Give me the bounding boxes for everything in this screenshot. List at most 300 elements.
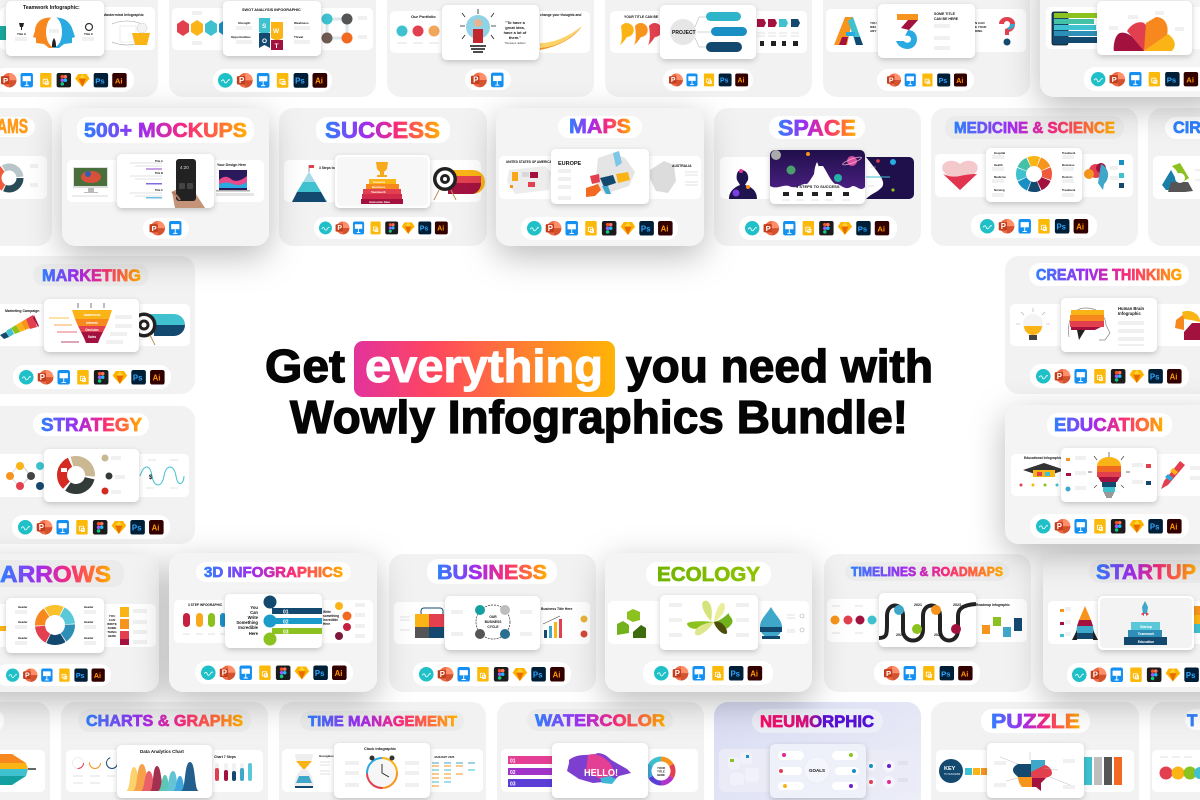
back slide: desktop and laptop mockups (67, 160, 264, 202)
center slide: trophy and steps: Awesome Idea (369, 200, 390, 204)
icon row: Ai (115, 76, 123, 85)
center slide: phone in hand: 4:20 (180, 165, 189, 170)
icon row: Ps (76, 672, 85, 680)
icon row (643, 661, 773, 685)
icon row (971, 214, 1097, 238)
back slide: pins: Incredible (323, 618, 338, 622)
center slide: 3D steps: 03 (283, 630, 289, 636)
back slide: network and wave: $ (149, 475, 153, 481)
card: project (605, 0, 812, 97)
heading: MARKETING: MARKETING (42, 266, 141, 285)
center slide: petal chart (1097, 1, 1192, 55)
icon row (0, 664, 111, 686)
center slide: SWOT analysis infographic: Weakness (294, 21, 309, 25)
center slide: trophy and steps: Teamwork (371, 190, 386, 194)
center slide: 3D steps: Incredible (238, 625, 259, 630)
back slide: tag list: THING (107, 630, 117, 634)
back slide: hourglass and calendar: JANUARY 2025 (434, 755, 455, 759)
icon row: Ai (1170, 522, 1177, 531)
center slide: arrow ring: Header (84, 620, 94, 624)
icon row: P (1093, 670, 1098, 679)
icon row: P (1057, 522, 1062, 531)
back slide: mastermind infographic (0, 7, 155, 50)
back slide: donuts and bars: Chart 7 Steps (214, 755, 236, 759)
center slide: number 3 (878, 4, 975, 58)
center slide: wheel infographic: Doctors (1062, 175, 1073, 179)
card: CHARTS & GRAPHS (61, 702, 268, 800)
icon row: Ai (661, 224, 668, 233)
center slide: 3D steps (225, 594, 322, 648)
back slide: watercolor stripes and ring: TITLE (657, 770, 665, 774)
icon row: P (239, 76, 244, 85)
back slide: key and puzzle columns (936, 750, 1134, 792)
back slide: portfolio (390, 11, 590, 53)
card: MEDICINE & SCIENCE (931, 108, 1138, 246)
center slide: 3D steps: Something (236, 620, 258, 625)
icon row: P (1057, 372, 1062, 381)
icon row (739, 216, 897, 240)
center slide: SWOT analysis infographic: Opportunities (231, 35, 251, 39)
card: PUZZLE (931, 702, 1139, 800)
card: ECOLOGY (shadowed) (605, 553, 812, 692)
center slide: human brain infographic: Infographic (1118, 311, 1141, 316)
icon row: P (152, 224, 157, 233)
center slide: teamwork heads: Title A (17, 32, 27, 36)
icon row: Ai (153, 373, 160, 382)
center slide: marketing funnel (44, 299, 139, 352)
center slide: phone in hand: Title B (155, 171, 163, 175)
icon row: Ai (437, 226, 444, 233)
back slide: portfolio: change your thoughts and (540, 13, 581, 17)
center slide: arrow ring: Header (18, 605, 28, 609)
back slide: key and puzzle columns: TO SUCCESS (944, 773, 961, 776)
icon row: Ai (877, 224, 885, 233)
back slide: USA and Australia maps: AUSTRALIA (672, 164, 692, 168)
center slide: 3D steps: You (250, 605, 258, 610)
back slide: phone bars (1046, 7, 1200, 49)
center slide: 3D steps: 01 (283, 610, 289, 616)
center slide: trophy and steps: Success (373, 180, 386, 184)
center slide: human brain infographic: Human Brain (1118, 306, 1145, 311)
card: STRATEGY (0, 406, 195, 544)
heading: NEUMORPHIC: NEUMORPHIC (760, 712, 874, 731)
headline line one: you need with (626, 340, 933, 392)
icon row (663, 69, 753, 91)
center slide: Europe map: EUROPE (558, 161, 582, 167)
back slide: letter A and question mark: ANY (870, 29, 876, 33)
center slide: brain puzzle (987, 743, 1084, 798)
center slide: Europe map (551, 149, 649, 204)
icon row: Ps (295, 77, 305, 86)
icon row (521, 217, 678, 240)
icon row: P (671, 77, 676, 84)
back slide: letter A and question mark: YOU (870, 21, 877, 25)
center slide: SWOT analysis infographic (223, 1, 321, 56)
center slide: winding road (879, 593, 976, 647)
center slide: wheel infographic: Treatment (1062, 188, 1075, 192)
back slide: pins: Write (323, 610, 331, 614)
back slide: watercolor stripes and ring: YOUR (657, 766, 665, 770)
back slide: key and puzzle columns: KEY (944, 766, 956, 772)
heading: TIMELINES & ROADMAPS: TIMELINES & ROADMAPS (851, 564, 1003, 579)
icon row: P (337, 225, 342, 232)
center slide: SWOT analysis infographic: T (274, 43, 278, 50)
center slide: wheel infographic: Hospital (994, 151, 1005, 155)
icon row: Ps (1150, 372, 1160, 381)
back slide: tag list: YOU (109, 614, 115, 618)
highlight pill: everything: everything (365, 340, 603, 392)
icon row: P (3, 76, 8, 85)
heading: EDUCATION: EDUCATION (1054, 415, 1163, 435)
center slide: wheel infographic: Nursing (994, 188, 1005, 192)
icon row: Ai (553, 670, 560, 679)
center slide: quote and bulb portrait: great idea, (505, 25, 525, 30)
center slide: data analytics chart: Data Analytics Chart (140, 749, 184, 754)
back slide: tag list: CAN (109, 618, 115, 622)
icon row: Ps (315, 669, 325, 678)
back slide: briefcase and bar chart (394, 602, 590, 644)
back slide: recycle and water drop (608, 601, 809, 644)
card: Teamwork and Mastermind (top row) (0, 0, 158, 97)
icon row: Ps (133, 373, 143, 382)
heading: CHARTS & GRAPHS: CHARTS & GRAPHS (86, 713, 243, 730)
back slide: watercolor stripes and ring (501, 749, 698, 792)
back slide: hourglass and calendar: Hourglass (319, 754, 334, 758)
icon row: Ps (941, 669, 951, 678)
card: 3D INFOGRAPHICS (shadowed) (169, 553, 377, 692)
icon row: Ps (1186, 671, 1196, 680)
center slide: marketing funnel: Sales (88, 335, 96, 339)
center slide: teamwork heads: Title C (84, 32, 94, 36)
back slide: pins: 3 STEP INFOGRAPHIC (188, 603, 223, 607)
center slide: SWOT analysis infographic: Threat (294, 35, 303, 39)
heading: SPACE: SPACE (778, 116, 856, 140)
center slide: quote and bulb portrait: them." (509, 35, 521, 40)
card: WATERCOLOR (497, 702, 704, 800)
center slide: bulb steps (1061, 448, 1157, 502)
center slide: human brain infographic (1061, 298, 1157, 352)
center slide: startup steps on map (1098, 596, 1194, 650)
card: 500+ MOCKUPS (shadowed) (62, 108, 269, 246)
center slide: phone in hand: Title A (155, 159, 163, 163)
headline: Get everything you need with Wowly Infographics Bundle! (265, 340, 933, 443)
icon row: Ps (533, 670, 543, 679)
icon row: Ai (961, 669, 968, 678)
card: SPACE (714, 108, 921, 246)
center slide: quote and bulb portrait (442, 5, 539, 60)
card: left edge row five (0, 702, 50, 800)
back slide: letter A and question mark: E YOUR (975, 25, 987, 29)
back slide: portfolio: Our Portfolio (411, 14, 436, 19)
back slide: colored heads (1152, 750, 1200, 792)
icon row: P (1112, 75, 1117, 84)
icon row: Ps (720, 78, 729, 85)
center slide: strategy wheel (44, 449, 139, 502)
center slide: SWOT analysis infographic: Strength (238, 21, 250, 25)
icon row: P (40, 373, 45, 382)
center slide: goals diagram (770, 744, 866, 798)
card: CIRCLE right edge (1148, 108, 1200, 246)
back slide: mastermind infographic: Mastermind Infographic (103, 13, 144, 17)
center slide: trophy and steps (335, 155, 430, 208)
card: MAPS (shadowed) (496, 108, 704, 246)
center slide: SWOT analysis infographic: S (262, 23, 267, 30)
card: NEUMORPHIC (714, 702, 921, 800)
heading: 500+ MOCKUPS: 500+ MOCKUPS (84, 120, 247, 142)
back slide: tag list: WRITE (107, 622, 117, 626)
back slide: USA and Australia maps: UNITED STATES OF AMERICA (506, 160, 553, 164)
center slide: clock infographic: Clock Infographic (364, 747, 396, 751)
icon row: P (473, 76, 478, 85)
card: STARTUP (shadowed) (1043, 554, 1200, 692)
back slide: watercolor stripes and ring: 01 (510, 758, 516, 764)
center slide: quote and bulb portrait: have a lot of (504, 30, 527, 35)
center slide: phone in hand (117, 154, 214, 208)
back slide: heart and brain (935, 154, 1133, 197)
icon row: Ps (420, 226, 428, 233)
heading: ECOLOGY: ECOLOGY (657, 564, 761, 586)
center slide: wheel infographic (986, 148, 1082, 202)
center slide: winding road: 2021 (914, 603, 922, 607)
back slide: graduation cap and pencil (1011, 454, 1200, 496)
back slide: pins: something (323, 614, 339, 618)
center slide: quote and bulb portrait: "To have a (505, 20, 526, 25)
center slide: marketing funnel: Awareness (84, 313, 101, 317)
center slide: wheel infographic: Business (1062, 163, 1075, 167)
center slide: winding road: 2023 (953, 603, 961, 607)
heading: STARTUP: STARTUP (1096, 561, 1196, 584)
back slide: donuts and bars (66, 750, 263, 792)
card: ARROWS (shadowed) (0, 554, 159, 692)
icon row: Ps (1150, 522, 1160, 531)
heading: CREATIVE THINKING (1029, 263, 1189, 286)
icon row (877, 69, 974, 91)
back slide: layered arrow (0, 750, 45, 792)
back slide: ring diagram (0, 156, 47, 199)
heading: STRATEGY: STRATEGY (41, 415, 142, 435)
heading: partial title: T (1187, 711, 1198, 730)
heading: BUSINESS (427, 559, 557, 584)
back slide: rocket stack (1048, 601, 1200, 644)
heading: SUCCESS: SUCCESS (325, 117, 440, 143)
center slide: SWOT analysis infographic: SWOT ANALYSIS INFOGRAPHIC (242, 8, 301, 12)
center slide: startup steps on map: Education (1138, 640, 1154, 644)
icon row (1067, 663, 1200, 687)
back slide: letter A and question mark (826, 9, 1026, 52)
card: CREATIVE THINKING (1005, 256, 1200, 394)
headline line one (265, 340, 933, 397)
back slide: neumorphic tiles (719, 749, 917, 792)
center slide: SWOT analysis infographic: O (262, 38, 267, 45)
center slide: marketing funnel: Decision (85, 328, 99, 332)
icon row (13, 365, 171, 389)
heading: PUZZLE: PUZZLE (991, 711, 1080, 733)
back slide: bulb and head (1010, 304, 1200, 346)
center slide: project diagram: PROJECT (672, 30, 696, 36)
heading: BUSINESS: BUSINESS (437, 562, 547, 584)
back slide: watercolor stripes and ring: HERE (657, 773, 665, 777)
card: petals top right (shadowed) (1040, 0, 1200, 97)
icon row (143, 218, 189, 239)
icon row: P (766, 224, 771, 233)
center slide: goals diagram: GOALS (809, 768, 825, 773)
heading: MEDICINE & SCIENCE (945, 116, 1124, 139)
back slide: astronaut silhouette and galaxy (720, 157, 914, 199)
icon row: Ai (94, 672, 101, 680)
card: circular economy left edge (0, 108, 52, 246)
icon row (465, 69, 511, 90)
card: alphabet and numbers (823, 0, 1030, 97)
center slide: data analytics chart (117, 745, 212, 798)
back slide: pins: Here (323, 622, 330, 626)
icon row (195, 661, 353, 684)
icon row: P (675, 669, 680, 678)
icon row: Ps (132, 523, 142, 532)
center slide: hello splash (552, 743, 648, 798)
back slide: letter A and question mark: DING (975, 29, 983, 33)
center slide: SWOT analysis infographic: W (273, 28, 280, 35)
center slide: marketing funnel: Interest (86, 321, 99, 325)
back slide: timeline dots and cylinders (827, 599, 1027, 642)
card: TIMELINES & ROADMAPS (824, 554, 1031, 692)
icon row: P (39, 523, 44, 532)
center slide: our business cycle: BUSINESS (485, 620, 502, 624)
icon row: Ai (750, 669, 758, 678)
center slide: clock infographic (334, 743, 430, 798)
icon row: Ps (858, 224, 867, 233)
icon row: Ai (152, 523, 159, 532)
headline line two: Wowly Infographics Bundle! (290, 391, 908, 443)
center slide: 3 steps to success (770, 150, 865, 204)
heading: partial pill (0, 709, 4, 732)
card: BUSINESS (389, 554, 596, 692)
back slide: letter A and question mark: WEI (870, 25, 876, 29)
icon row (1030, 514, 1189, 538)
card: SWOT analysis (169, 0, 376, 97)
icon row: Ps (641, 224, 651, 233)
icon row: Ps (1167, 75, 1176, 84)
center slide: 3 steps to success: 3 STEPS TO SUCCESS (796, 184, 840, 189)
heading: MEDICINE & SCIENCE: MEDICINE & SCIENCE (954, 120, 1115, 137)
back slide: watercolor stripes and ring: 02 (510, 770, 516, 776)
back slide: pins (174, 600, 373, 643)
center slide: number 3: SOME TITLE (934, 12, 956, 16)
icon row: Ps (1056, 222, 1067, 231)
icon row: Ai (1186, 75, 1194, 84)
card: EDUCATION (shadowed) (1005, 405, 1200, 544)
heading: MAPS: MAPS (569, 116, 631, 138)
icon row: Ps (730, 669, 741, 678)
icon row (1030, 364, 1189, 388)
center slide: winding road: 2022 (934, 633, 942, 637)
center slide: 3D steps: Can (250, 610, 258, 615)
icon row: Ai (1170, 372, 1177, 381)
icon row (874, 661, 980, 685)
heading: ARROWS: ARROWS (0, 561, 111, 587)
icon row: Ai (956, 78, 963, 85)
back slide: mountain and target: 3 Steps to (319, 166, 335, 170)
center slide: teamwork heads (6, 1, 104, 56)
center slide: trophy and steps: Business (372, 185, 386, 189)
icon row: Ai (315, 77, 323, 86)
icon row (1084, 67, 1200, 91)
center slide: startup steps on map: Startup (1140, 625, 1152, 629)
back slide: tag list: SOME (108, 626, 116, 630)
center slide: wheel infographic: Medicine (994, 175, 1006, 179)
center slide: arrow ring: Header (18, 620, 28, 624)
icon row (0, 68, 134, 92)
center slide: our business cycle: CYCLE (487, 625, 499, 629)
icon row: Ai (1076, 222, 1084, 231)
back slide: letter A and question mark: N CAN (975, 21, 984, 25)
icon row: P (25, 672, 30, 680)
icon row: P (548, 224, 553, 233)
icon row (213, 69, 332, 92)
card: TIME MANAGEMENT (279, 702, 486, 800)
heading: CHARTS & GRAPHS (78, 709, 251, 732)
center slide: startup steps on map: Teamwork (1138, 632, 1154, 636)
icon row (314, 217, 452, 239)
back slide: tag list (0, 604, 156, 647)
back slide: desktop and laptop mockups: Your Design Here (217, 163, 246, 167)
center slide: arrow ring (6, 598, 104, 653)
back slide: megaphone and target: Marketing Campaign (5, 309, 39, 313)
back slide: SWOT hexagons and circles (172, 8, 373, 50)
headline line one: Get (265, 340, 345, 392)
center slide: hello splash: HELLO! (584, 768, 618, 779)
heading: CREATIVE THINKING: CREATIVE THINKING (1036, 267, 1182, 284)
back slide: graduation cap and pencil: Educational Infographic (1024, 456, 1062, 460)
back slide: hourglass and calendar (282, 749, 483, 792)
center slide: our business cycle: OUR (489, 615, 497, 619)
icon row: P (222, 668, 227, 677)
center slide: wheel infographic: Health (994, 163, 1003, 167)
center slide: arrow ring: Header (84, 636, 94, 640)
heading: WATERCOLOR: WATERCOLOR (535, 711, 665, 730)
center slide: our business cycle (445, 596, 540, 650)
center slide: number 3: CAN BE HERE (934, 17, 959, 21)
card: MARKETING (0, 256, 195, 394)
center slide: arrow ring: Header (18, 636, 28, 640)
icon row: P (889, 77, 894, 84)
card: SUCCESS (279, 108, 487, 246)
center slide: teamwork heads: Teamwork Infographic: (23, 5, 80, 11)
back slide: briefcase and bar chart: Business Title Here (541, 607, 573, 611)
center slide: quote and bulb portrait: Thomas A. Edison (504, 41, 526, 45)
icon row: P (886, 669, 891, 678)
heading: MAPS (558, 116, 642, 138)
back slide: timeline dots and cylinders: Roadmap Infographic (976, 603, 1010, 607)
center slide: arrow ring: Header (84, 605, 94, 609)
heading: TIME MANAGEMENT: TIME MANAGEMENT (308, 713, 457, 730)
icon row: Ai (335, 669, 342, 678)
back slide: watercolor stripes and ring: 03 (510, 782, 516, 788)
back slide: USA and Australia maps (499, 156, 701, 199)
back slide: triangular cycle (1153, 156, 1200, 199)
center slide: 3D steps: Write (248, 615, 259, 620)
icon row (413, 662, 571, 686)
heading: PUZZLE (981, 709, 1090, 733)
center slide: winding road: 2020 (896, 633, 904, 637)
center slide: 3D steps: 02 (283, 620, 289, 626)
icon row: P (440, 670, 445, 679)
icon row (12, 515, 170, 539)
icon row: Ps (939, 78, 947, 85)
back slide: mountain and target (284, 160, 485, 202)
center slide: phone in hand: Title C (155, 188, 163, 192)
center slide: leaf flower (660, 595, 758, 650)
back slide: tag list: HERE (108, 634, 116, 638)
